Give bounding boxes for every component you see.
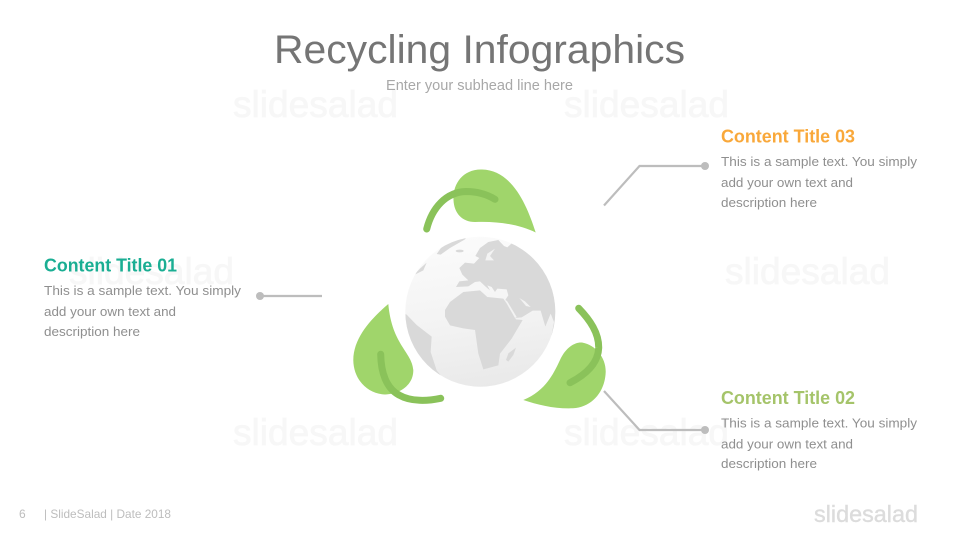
- connector: content 03: [604, 162, 709, 206]
- watermarks: slidesalad: [725, 251, 890, 292]
- icon: globe: [400, 237, 563, 387]
- text block: content 01 description: description here: [44, 324, 140, 339]
- text block: content 02 description: add your own text and: [721, 436, 853, 452]
- watermarks: slidesalad: [233, 84, 398, 125]
- text block: content 03 description: This is a sample text. You simply: [721, 154, 918, 169]
- footer: page number: 6: [19, 507, 26, 521]
- leaf: right: [523, 308, 606, 408]
- text block: content 03 description: [721, 154, 918, 210]
- text block: content 02 description: description here: [721, 456, 817, 471]
- text block: content 02 description: This is a sample text. You simply: [721, 416, 918, 430]
- watermarks: slidesalad: [564, 84, 729, 125]
- watermarks: slidesalad: [564, 412, 729, 453]
- callout: content 03: [721, 126, 918, 210]
- text block: content 01 description: This is a sample text. You simply: [44, 283, 242, 298]
- heading: content title 02: Content Title 02: [721, 387, 855, 408]
- recycling globe graphic: [353, 169, 606, 408]
- leaf: left: [353, 304, 441, 400]
- connector: content 01: [256, 292, 322, 300]
- heading: content title 03: Content Title 03: [721, 126, 855, 147]
- watermarks: slidesalad: [69, 251, 234, 292]
- watermarks: slidesalad: [233, 412, 398, 453]
- callout: content 01: [44, 254, 242, 339]
- text block: content 01 description: [44, 283, 242, 339]
- callout: content 02: [721, 387, 918, 471]
- text block: content 03 description: description here: [721, 195, 817, 210]
- heading: content title 01: Content Title 01: [44, 254, 177, 276]
- subhead: Enter your subhead line here: [386, 77, 573, 94]
- connector: content 02: [604, 391, 709, 434]
- text block: content 03 description: add your own text and: [721, 175, 853, 190]
- footer: source and date: | SlideSalad | Date 2018: [44, 507, 171, 521]
- title: Recycling Infographics: [274, 28, 685, 72]
- text block: content 02 description: [721, 416, 918, 471]
- text block: content 01 description: add your own text and: [44, 304, 176, 319]
- leaf: top: [427, 169, 536, 232]
- footer: logo: slidesalad: [814, 501, 918, 527]
- watermarks: [69, 84, 890, 453]
